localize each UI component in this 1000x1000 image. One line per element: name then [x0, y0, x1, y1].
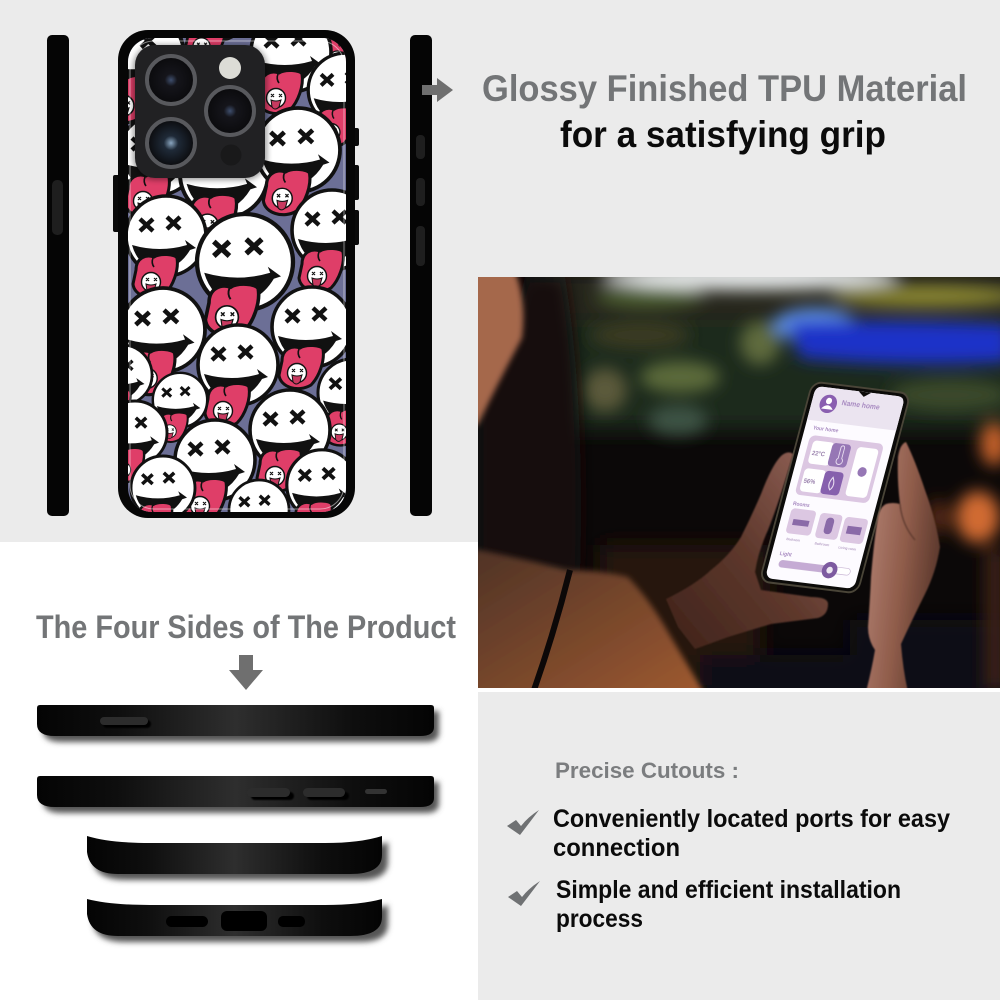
- case side buttons: [113, 128, 359, 245]
- right hand: [866, 442, 940, 692]
- room labels: Living room: [838, 545, 857, 552]
- sensor card: [795, 435, 884, 504]
- side view 3: top edge: [87, 836, 388, 880]
- feature text: ports: Conveniently located ports for easy: [553, 805, 950, 833]
- arrow pointing down to side views: [229, 655, 263, 690]
- subheading: for a satisfying grip: for a satisfying grip: [560, 114, 886, 155]
- room labels: [786, 538, 856, 551]
- woman shoulder: [470, 548, 706, 696]
- smiley face pattern: [128, 38, 346, 512]
- room labels: Bedroom: [786, 537, 801, 543]
- light slider: [778, 560, 851, 578]
- side view 4: bottom edge with ports: [87, 899, 388, 942]
- feature text: installation: [556, 876, 901, 933]
- feature text: installation: Simple and efficient installation: [556, 876, 901, 904]
- smartphone: [760, 382, 910, 593]
- smartphone screen: [765, 386, 905, 589]
- icon: check mark 1: [507, 810, 539, 835]
- blurred background scenery: [540, 270, 1000, 700]
- app title: Name home: [841, 399, 881, 412]
- inner gloss line: [130, 41, 344, 509]
- camera module: [133, 45, 267, 180]
- phone case right side view: [410, 35, 432, 516]
- arrow pointing right to heading: [422, 78, 453, 102]
- panel: gray top background: [0, 0, 1000, 542]
- side view 2: right side: [37, 776, 439, 813]
- feature text: ports: [553, 805, 950, 862]
- panel: gray lower right background: [478, 692, 1000, 1000]
- phone case left side view: [47, 35, 69, 516]
- heading: precise cutouts: Precise Cutouts :: [555, 758, 739, 783]
- feature text: installation: process: [556, 905, 643, 933]
- photo: woman holding smartphone: [470, 264, 1000, 700]
- left hand: [666, 452, 828, 649]
- section label: your home: Your home: [812, 425, 839, 434]
- woman hair silhouette: [478, 277, 581, 575]
- bra strap: [534, 570, 570, 690]
- room tiles: [785, 508, 869, 544]
- side view 1: left side: [37, 705, 439, 742]
- sensor card: 22°C: [811, 450, 826, 459]
- woman cheek and neck: [478, 277, 528, 428]
- icon: check mark 2: [508, 881, 540, 906]
- room labels: Bathroom: [814, 541, 830, 547]
- section label: rooms: Rooms: [792, 501, 810, 509]
- heading: the four sides of the product: The Four Sides of The Product: [36, 609, 456, 645]
- phone case back view: [113, 30, 359, 518]
- user avatar: [820, 394, 837, 413]
- feature text: ports: connection: [553, 834, 680, 862]
- case black frame: [118, 30, 355, 518]
- section label: light: Light: [779, 551, 793, 559]
- heading: glossy finished TPU material: Glossy Finished TPU Material: [482, 68, 967, 109]
- sensor card: 56%: [803, 478, 817, 486]
